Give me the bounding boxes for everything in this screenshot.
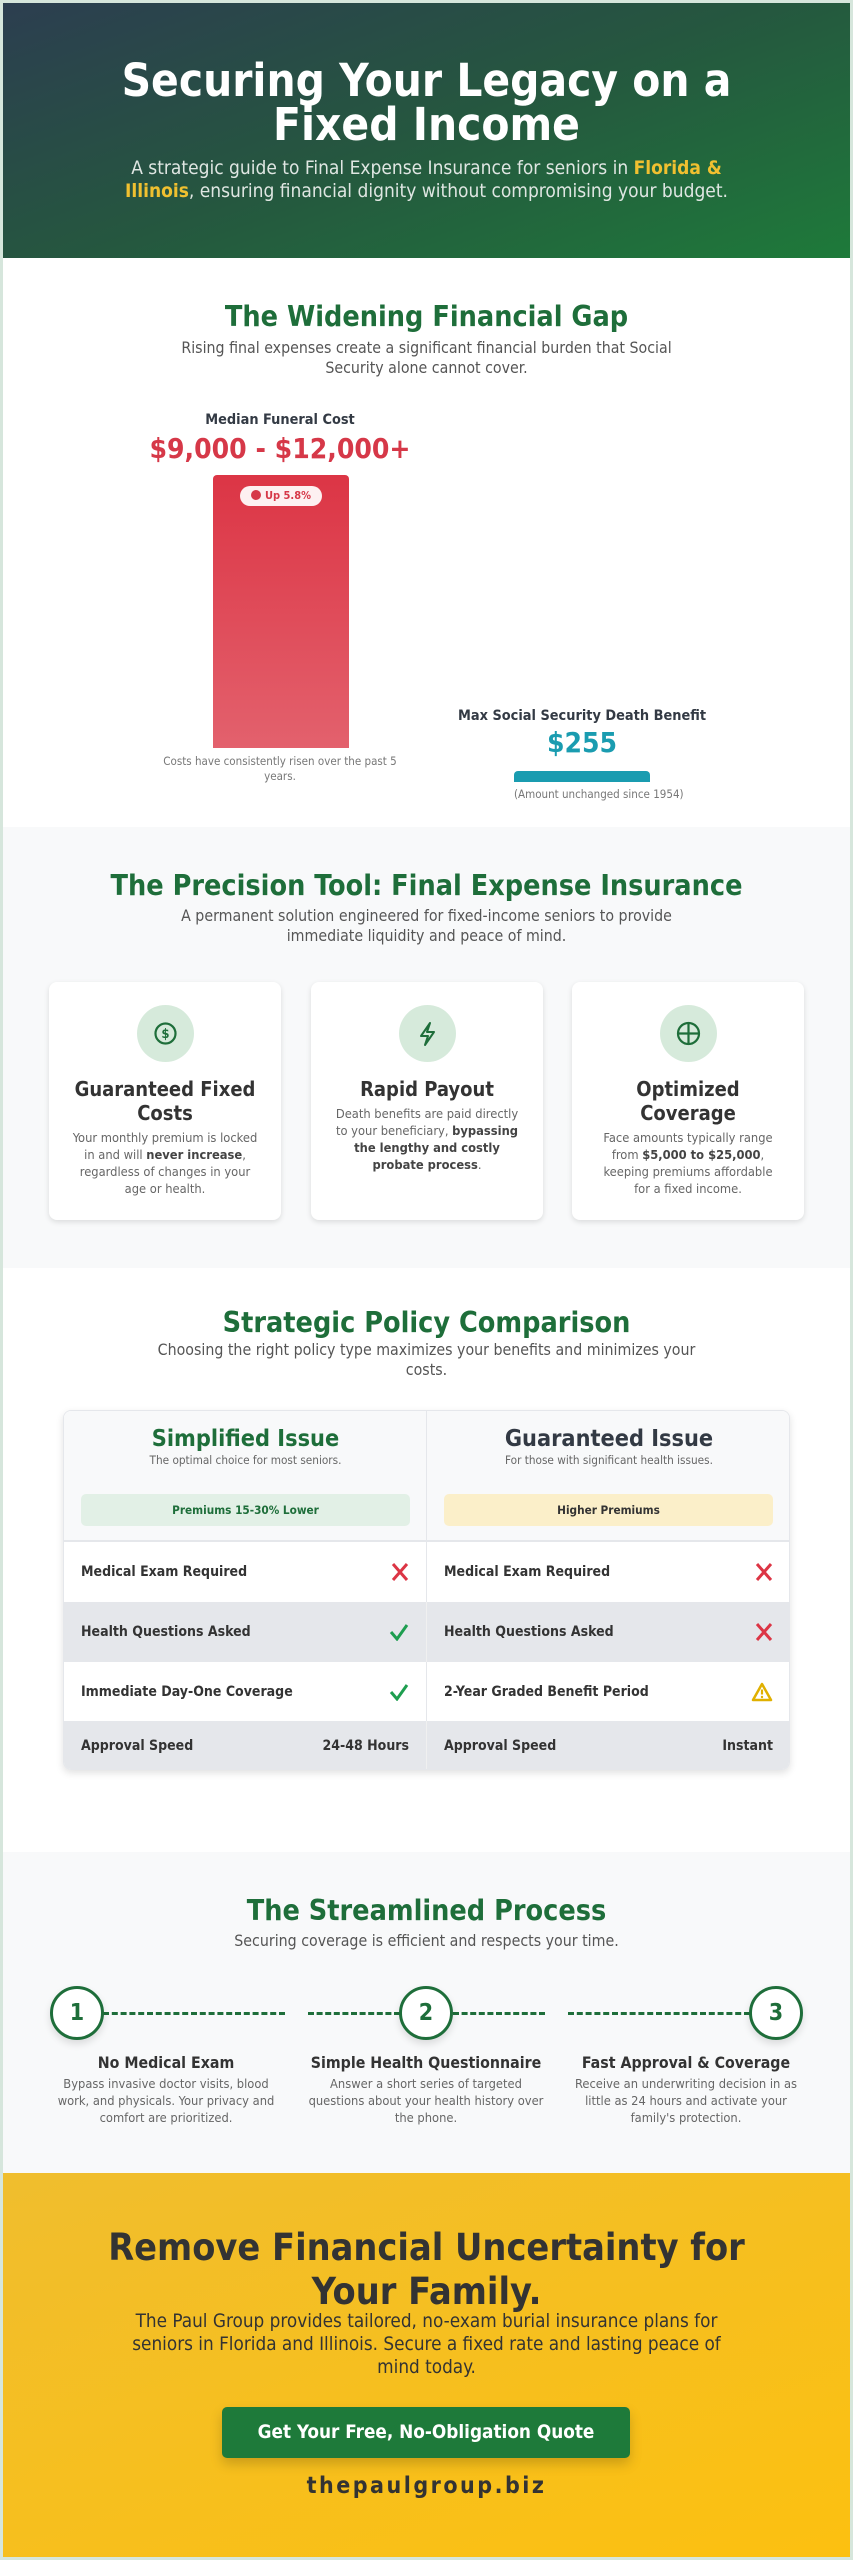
bar chart: social security: $255 [547,726,617,759]
row medical exam: Medical Exam Required [444,1564,610,1580]
CTA section [3,2173,850,2557]
subheading process: Securing coverage is efficient and respects your time. [234,1931,619,1950]
section: process [3,1852,850,2173]
heading comparison: Strategic Policy Comparison [223,1306,630,1339]
subheading gap: Rising final expenses create a significant financial burden that Social Security alone cannot cover. [181,338,672,377]
row approval speed: 24-48 Hours [322,1738,409,1754]
CTA heading: Remove Financial Uncertainty for [108,2225,745,2269]
row health questions [64,1602,791,1662]
card: optimized coverage [572,982,804,1220]
header guaranteed [427,1411,791,1542]
badge up 5.8% [240,486,322,506]
step 2 text: Answer a short series of targeted questions about your health history over the phone. [309,2077,543,2126]
bar chart: social security: (Amount unchanged since 1954) [514,787,684,801]
bar chart: funeral cost: Median Funeral Cost [205,412,355,428]
header simplified: Premiums 15-30% Lower [172,1503,319,1517]
section: precision tool [3,827,850,1268]
section: financial gap [3,258,850,827]
step 3: 3 [769,2000,783,2026]
card: rapid payout [311,982,543,1220]
row coverage: 2-Year Graded Benefit Period [444,1684,649,1700]
card: rapid payout: Rapid Payout [360,1077,494,1101]
red bar [213,475,349,748]
CTA button: Get Your Free, No-Obligation Quote [258,2422,594,2443]
row health questions: Health Questions Asked [81,1624,251,1640]
step 3 text: Fast Approval & Coverage [582,2053,790,2072]
section: comparison [3,1268,850,1852]
card: optimized coverage: Optimized Coverage [636,1077,740,1125]
step 1 text: No Medical Exam [98,2053,234,2072]
icon: dollar [137,1005,194,1062]
CTA button [222,2407,630,2458]
header simplified: The optimal choice for most seniors. [150,1453,341,1467]
comparison table [63,1410,790,1770]
subheading precision: A permanent solution engineered for fixed-income seniors to provide immediate liquidity and peace of mind. [181,906,672,945]
bar chart: social security [458,708,706,801]
header guaranteed: Higher Premiums [557,1503,660,1517]
header guaranteed: Guaranteed Issue [505,1425,713,1452]
step 3 text: Receive an underwriting decision in as little as 24 hours and activate your family's protection. [575,2077,797,2126]
CTA heading [108,2225,745,2313]
row medical exam: Medical Exam Required [81,1564,247,1580]
step 1 text [58,2053,274,2126]
row approval speed: Approval Speed [81,1738,193,1754]
title [122,54,731,151]
title: Fixed Income [273,98,580,151]
header guaranteed: For those with significant health issues. [505,1453,713,1467]
CTA heading: Your Family. [312,2269,541,2313]
card: rapid payout: Death benefits are paid directly to your beneficiary, bypassing the lengthy and costly probate process. [336,1107,518,1173]
row approval speed: Instant [722,1738,773,1754]
step 2: 2 [419,2000,433,2026]
heading: widening gap: The Widening Financial Gap [225,300,628,333]
subtitle: A strategic guide to Final Expense Insurance for seniors in Florida & Illinois, ensuring financial dignity without compromising your budget. [125,157,728,202]
header simplified: Simplified Issue [152,1425,339,1452]
heading process: The Streamlined Process [247,1894,606,1927]
row coverage: Immediate Day-One Coverage [81,1684,293,1700]
bar chart: funeral cost: Costs have consistently risen over the past 5 years. [163,754,397,783]
step 2 text: Simple Health Questionnaire [311,2053,541,2072]
row coverage [64,1662,791,1722]
heading precision tool: The Precision Tool: Final Expense Insurance [111,869,742,902]
row approval speed: Approval Speed [444,1738,556,1754]
step 1 text: Bypass invasive doctor visits, blood work, and physicals. Your privacy and comfort are prioritized. [58,2077,274,2126]
row health questions: Health Questions Asked [444,1624,614,1640]
header simplified [64,1411,427,1542]
row approval speed [64,1721,791,1771]
bar chart: social security: Max Social Security Death Benefit [458,708,706,724]
website: thepaulgroup.biz [307,2473,546,2499]
CTA paragraph: The Paul Group provides tailored, no-exam burial insurance plans for seniors in Florida and Illinois. Secure a fixed rate and lasting peace of mind today. [132,2311,721,2378]
icon: crosshair [660,1005,717,1062]
icon: dollar: $ [161,1027,170,1042]
icon: bolt [399,1005,456,1062]
step 3 text [575,2053,797,2126]
step 1: 1 [70,2000,84,2026]
subheading comparison: Choosing the right policy type maximizes your benefits and minimizes your costs. [158,1340,695,1379]
bar chart: funeral cost [149,412,411,783]
row medical exam [64,1542,791,1602]
step 2 text [309,2053,544,2126]
card: guaranteed fixed costs [49,982,281,1220]
dashed connectors [103,2012,285,2015]
title: Securing Your Legacy on a [122,54,731,107]
card: optimized coverage: Face amounts typically range from $5,000 to $25,000, keeping premiums affordable for a fixed income. [603,1131,773,1197]
badge up 5.8%: Up 5.8% [265,489,311,502]
bar chart: funeral cost: $9,000 - $12,000+ [149,432,411,465]
header [3,3,850,258]
card: guaranteed fixed costs: Guaranteed Fixed Costs [75,1077,255,1125]
card: guaranteed fixed costs: Your monthly premium is locked in and will never increase, regardless of changes in your age or health. [73,1131,257,1197]
teal bar [514,771,650,782]
